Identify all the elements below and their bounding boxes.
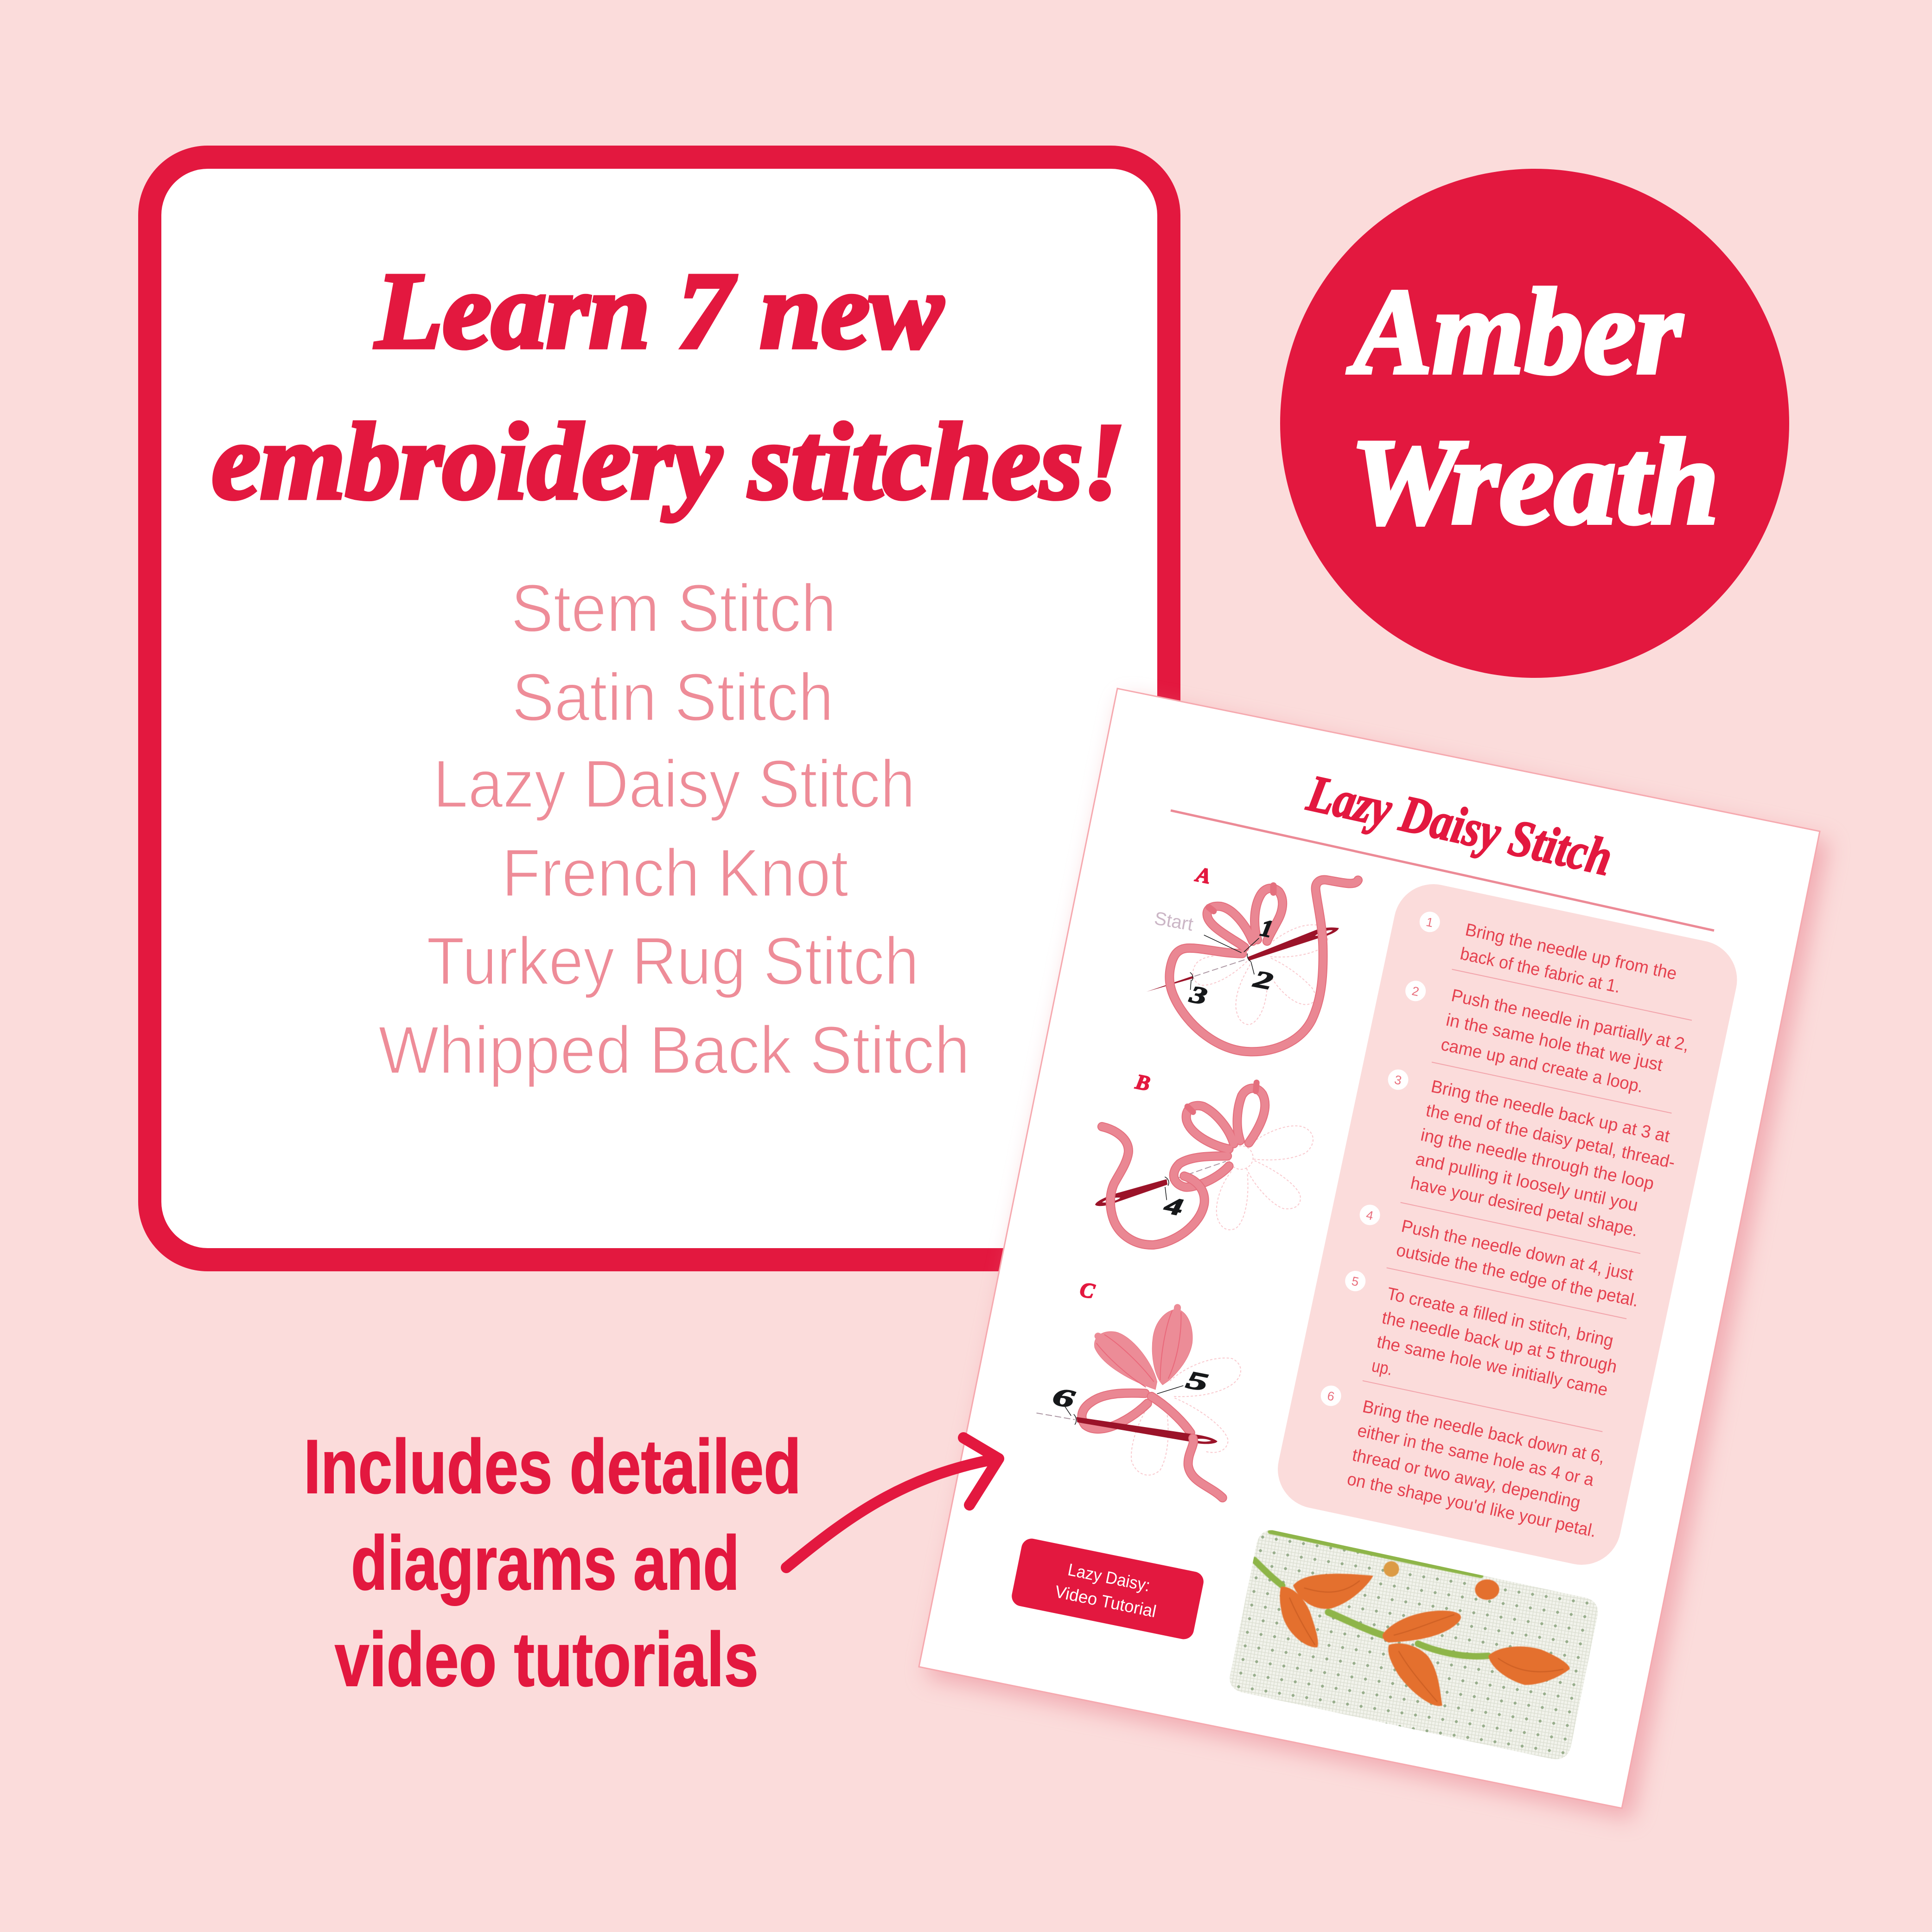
heading: learn 7 new embroidery stitches: Learn 7 new bbox=[375, 250, 944, 371]
step 1: Bring the needle up from the bbox=[1464, 920, 1678, 984]
step 2: 2 bbox=[1410, 984, 1420, 999]
step 3: ing the needle through the loop bbox=[1419, 1125, 1656, 1194]
callout: includes detailed diagrams and video tutorials: Includes detailed bbox=[304, 1424, 801, 1509]
heading: learn 7 new embroidery stitches bbox=[212, 250, 1125, 522]
badge: amber wreath: Wreath bbox=[1350, 414, 1719, 550]
step 1: 1 bbox=[1425, 915, 1435, 930]
list of stitches bbox=[378, 570, 970, 1088]
step 2: Push the needle in partially at 2, bbox=[1450, 986, 1691, 1055]
worksheet page shadow bbox=[926, 698, 1829, 1820]
video tutorial button: Video Tutorial bbox=[1053, 1582, 1158, 1621]
step 4: Push the needle down at 4, just bbox=[1400, 1217, 1635, 1285]
step 3: the end of the daisy petal, thread- bbox=[1424, 1101, 1677, 1173]
list of stitches: Satin Stitch bbox=[512, 659, 834, 735]
label start: Start bbox=[1153, 908, 1195, 935]
marker 3: 3 bbox=[1187, 981, 1209, 1010]
marker 2: 2 bbox=[1251, 966, 1275, 995]
step 5: up. bbox=[1370, 1356, 1394, 1379]
step 3: 3 bbox=[1393, 1072, 1403, 1088]
step 4: 4 bbox=[1365, 1208, 1375, 1223]
step 6 bbox=[1303, 1384, 1614, 1541]
step 3: and pulling it loosely until you bbox=[1414, 1149, 1640, 1216]
step 4: outside the the edge of the petal. bbox=[1395, 1240, 1640, 1311]
step 3: have your desired petal shape. bbox=[1409, 1173, 1639, 1241]
video tutorial button bbox=[1010, 1537, 1205, 1641]
step 6: thread or two away, depending bbox=[1351, 1445, 1582, 1513]
step 5: 5 bbox=[1351, 1274, 1360, 1289]
step 3: Bring the needle back up at 3 at bbox=[1429, 1077, 1671, 1147]
worksheet title: Lazy Daisy Stitch bbox=[1302, 764, 1617, 887]
step 1: back of the fabric at 1. bbox=[1459, 944, 1622, 997]
step 1 bbox=[1413, 910, 1678, 1008]
badge: amber wreath: Amber bbox=[1346, 264, 1684, 400]
callout: includes detailed diagrams and video tutorials: video tutorials bbox=[335, 1617, 759, 1702]
step 2 bbox=[1394, 976, 1691, 1104]
marker 1: 1 bbox=[1258, 915, 1275, 943]
diagram B bbox=[1095, 1070, 1313, 1245]
step 6: Bring the needle back down at 6, bbox=[1361, 1397, 1607, 1467]
step 3 bbox=[1366, 1068, 1682, 1245]
step 4 bbox=[1352, 1203, 1646, 1311]
panel: lazy daisy worksheet page bbox=[919, 689, 1820, 1808]
label B: B bbox=[1133, 1070, 1152, 1096]
label A: A bbox=[1193, 862, 1213, 888]
list of stitches: Stem Stitch bbox=[511, 570, 836, 646]
heading: learn 7 new embroidery stitches: embroidery stitches! bbox=[212, 401, 1125, 522]
step 6: either in the same hole as 4 or a bbox=[1356, 1421, 1596, 1490]
photo: stitched leaves on linen bbox=[1230, 1530, 1598, 1759]
list of stitches: Whipped Back Stitch bbox=[378, 1012, 970, 1088]
marker 4: 4 bbox=[1162, 1192, 1185, 1221]
step 2: in the same hole that we just bbox=[1444, 1010, 1664, 1075]
diagram C bbox=[1036, 1277, 1241, 1498]
step 5: the same hole we initially came bbox=[1375, 1332, 1609, 1400]
marker 5: 5 bbox=[1184, 1365, 1210, 1397]
label C: C bbox=[1078, 1277, 1097, 1303]
step 5: To create a filled in stitch, bring bbox=[1385, 1284, 1615, 1351]
step 6: on the shape you'd like your petal. bbox=[1345, 1469, 1598, 1541]
step 6: 6 bbox=[1326, 1389, 1336, 1404]
list of stitches: Lazy Daisy Stitch bbox=[433, 746, 915, 822]
callout: includes detailed diagrams and video tutorials bbox=[304, 1424, 801, 1702]
callout: includes detailed diagrams and video tutorials: diagrams and bbox=[351, 1520, 740, 1606]
step 5: the needle back up at 5 through bbox=[1380, 1308, 1619, 1377]
panel: stitch list card bbox=[150, 157, 1169, 1260]
badge: amber wreath bbox=[1280, 169, 1789, 678]
arrow pointing to worksheet bbox=[786, 1438, 999, 1568]
list of stitches: Turkey Rug Stitch bbox=[427, 923, 919, 999]
list of stitches: French Knot bbox=[502, 835, 848, 911]
video tutorial button: Lazy Daisy: bbox=[1066, 1560, 1152, 1595]
step 2: came up and create a loop. bbox=[1439, 1035, 1645, 1097]
panel: instruction steps bbox=[1270, 877, 1744, 1572]
diagram A bbox=[1147, 862, 1358, 1052]
marker 6: 6 bbox=[1051, 1382, 1077, 1414]
step 5 bbox=[1327, 1269, 1625, 1425]
